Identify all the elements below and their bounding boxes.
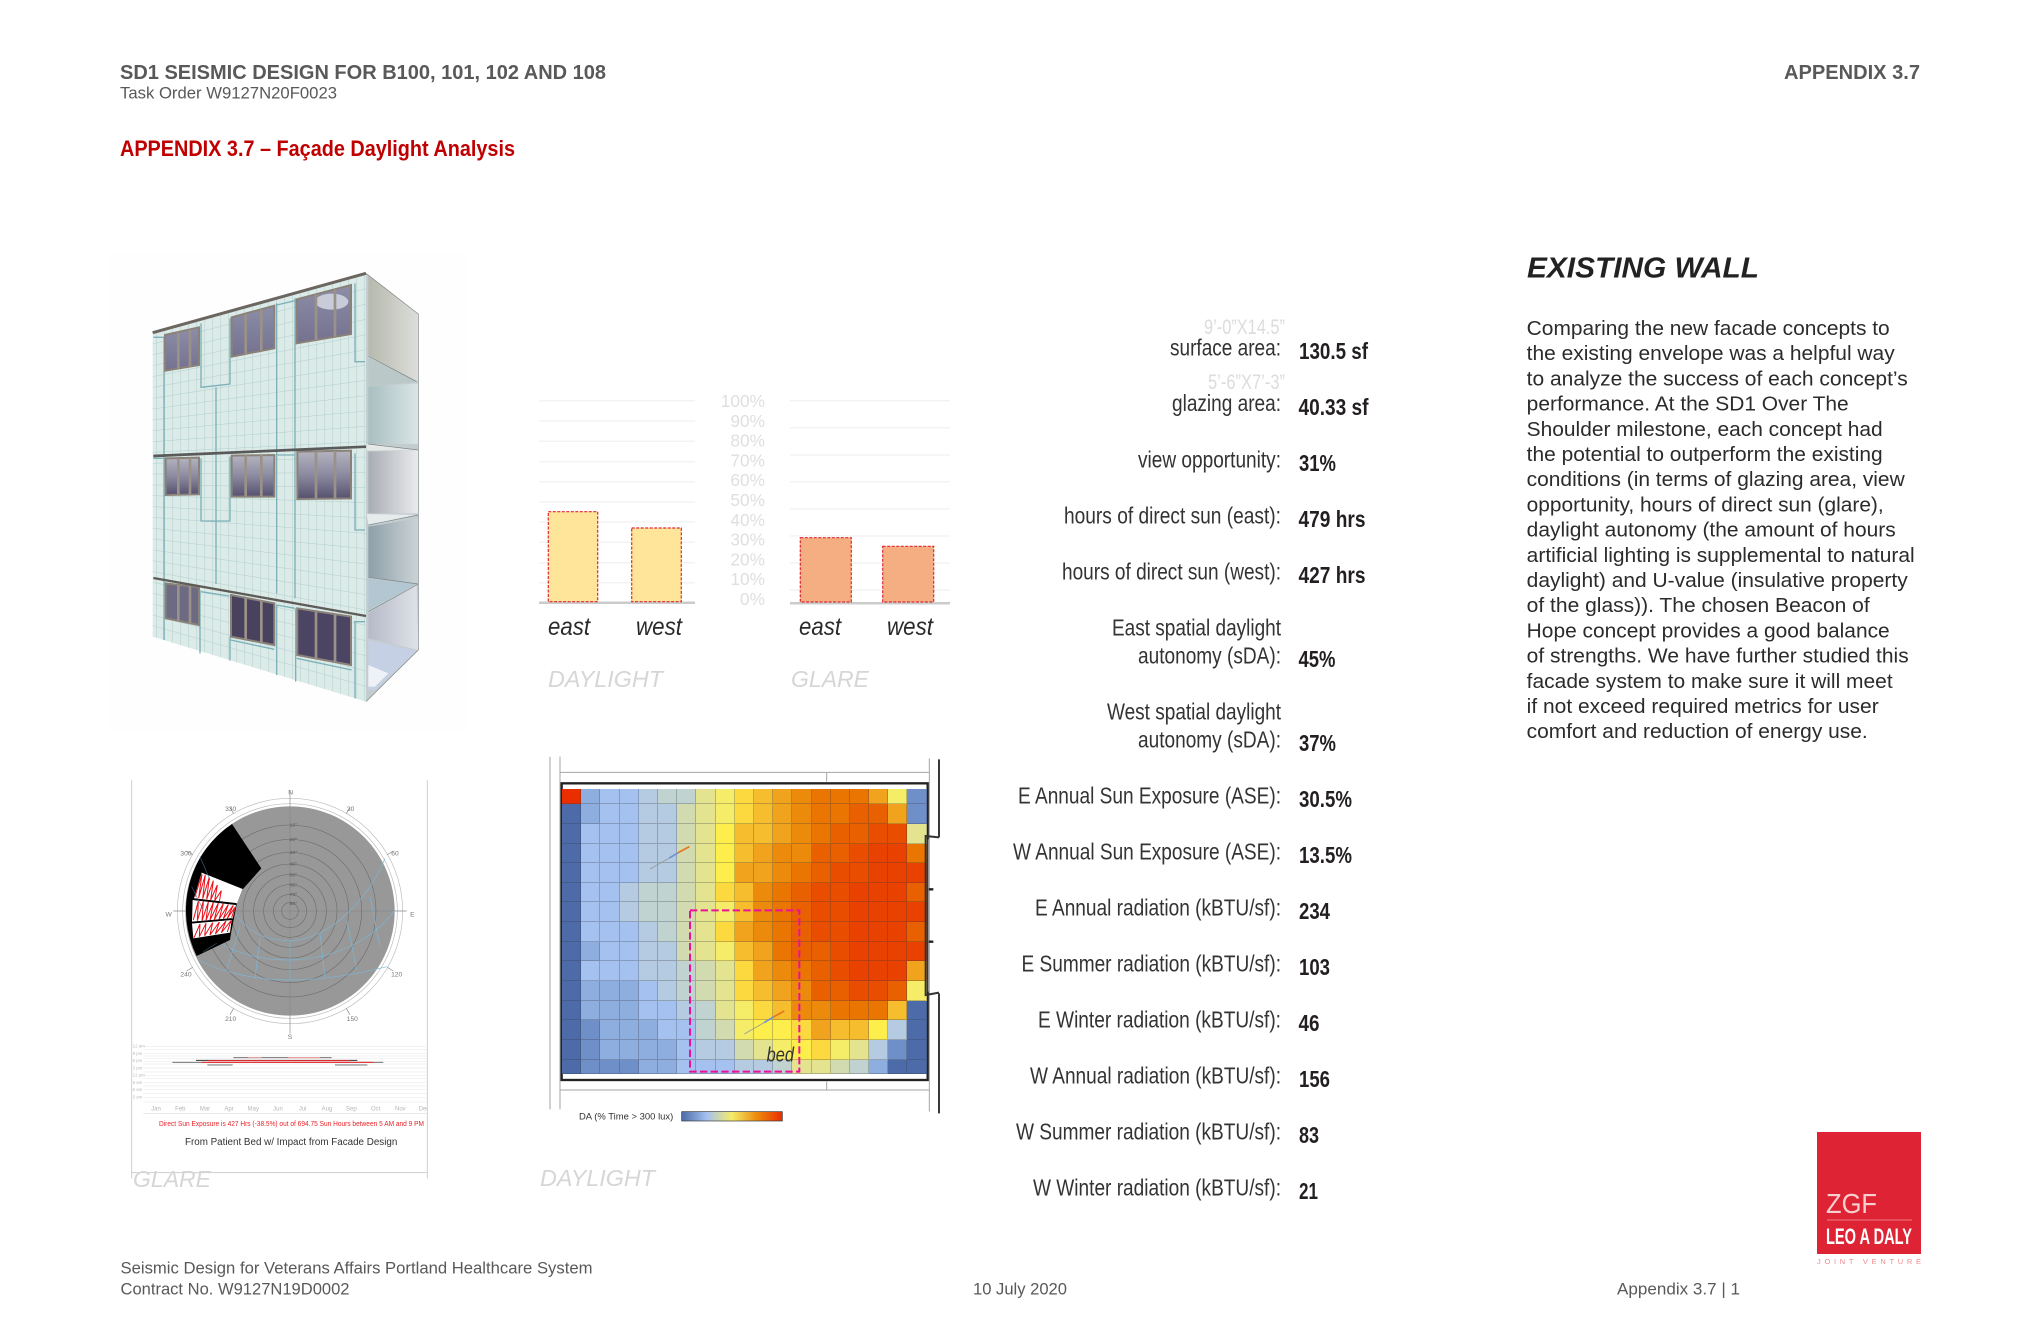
heatmap legend: [579, 1112, 782, 1122]
existing wall paragraph: facade system to make sure it will meet: [1527, 670, 1893, 693]
compass labels: 150: [347, 1016, 358, 1023]
metrics: surface area: 130.5 sf: [1299, 338, 1368, 364]
metrics: direct sun east: hours of direct sun (east):: [1064, 502, 1281, 528]
sun hours chart: 9 am: [133, 1080, 143, 1085]
compass labels: 60: [391, 850, 399, 857]
compass labels: [166, 789, 415, 1041]
metrics: W annual radiation: 156: [1299, 1066, 1330, 1092]
metrics: east sDA: autonomy (sDA):: [1138, 642, 1281, 668]
footer date: 10 July 2020: [973, 1280, 1067, 1298]
existing wall paragraph: Shoulder milestone, each concept had: [1527, 418, 1883, 441]
sun hours chart: Sep: [346, 1106, 357, 1112]
sun hours chart: Jan: [151, 1106, 161, 1112]
metrics: W winter radiation: W Winter radiation (kBTU/sf):: [1033, 1174, 1281, 1200]
compass labels: S: [288, 1034, 293, 1041]
ZGF Leo A Daly logo: LEO A DALY: [1826, 1224, 1912, 1249]
glare bar chart: [790, 401, 950, 692]
compass labels: 210: [225, 1016, 237, 1023]
compass labels: 10°: [290, 823, 297, 829]
percent axis labels: 70%: [730, 450, 765, 470]
glare chart caption: GLARE: [791, 666, 870, 692]
existing wall paragraph: conditions (in terms of glazing area, view: [1527, 468, 1905, 491]
existing wall heading: EXISTING WALL: [1527, 252, 1759, 284]
metrics: glazing area: 40.33 sf: [1298, 394, 1369, 420]
existing wall paragraph: if not exceed required metrics for user: [1527, 695, 1879, 718]
windows: [165, 285, 351, 665]
sun hours chart: May: [248, 1106, 259, 1112]
ZGF Leo A Daly logo: ZGF: [1826, 1188, 1877, 1219]
appendix tag top right: APPENDIX 3.7: [1784, 61, 1920, 84]
metrics: glazing area: 5’-6”X7’-3”: [1208, 371, 1285, 394]
percent axis labels: 50%: [730, 490, 765, 510]
metrics: E ASE: 30.5%: [1299, 786, 1352, 812]
compass labels: 50°: [290, 872, 297, 878]
compass labels: N: [288, 789, 293, 796]
daylight east label: east: [548, 613, 591, 641]
percent axis labels: 100%: [721, 391, 765, 411]
daylight panel caption: DAYLIGHT: [540, 1165, 657, 1191]
glare west bar: [883, 546, 934, 602]
sun hours chart: Oct: [371, 1106, 381, 1112]
metrics: E annual radiation: 234: [1299, 898, 1330, 924]
percent axis labels: 90%: [730, 411, 765, 431]
existing wall paragraph: to analyze the success of each concept’s: [1527, 367, 1908, 390]
floor bands: [153, 273, 366, 616]
metrics: W winter radiation: 21: [1299, 1178, 1318, 1204]
metrics: E winter radiation: 46: [1298, 1010, 1320, 1036]
metrics: east sDA: East spatial daylight: [1112, 614, 1281, 640]
direct sun caption: Direct Sun Exposure is 427 Hrs (-38.5%) out of 694.75 Sun Hours between 5 AM and 9 PM: [159, 1121, 424, 1128]
shaded obstruction: [186, 824, 261, 956]
sun hours chart: Aug: [322, 1106, 332, 1112]
compass labels: 20°: [290, 837, 297, 843]
sun hours chart: 9 pm: [133, 1051, 143, 1056]
metrics: E annual radiation: E Annual radiation (kBTU/sf):: [1035, 894, 1281, 920]
compass labels: 70°: [290, 892, 297, 898]
sun hours chart: Jun: [273, 1106, 283, 1112]
metrics: west sDA: [1107, 698, 1336, 756]
compass labels: 30: [347, 806, 355, 813]
percent axis labels: 0%: [740, 589, 765, 609]
footer page number: Appendix 3.7 | 1: [1617, 1280, 1740, 1298]
sun hours chart: 12 pm: [133, 1073, 145, 1078]
sun hours chart: 6 pm: [133, 1058, 143, 1063]
sun hours chart: 6 am: [133, 1087, 143, 1092]
existing wall paragraph: the potential to outperform the existing: [1527, 443, 1883, 466]
percent axis labels: 20%: [730, 549, 765, 569]
daylight west label: west: [636, 613, 683, 641]
compass labels: 30°: [290, 850, 297, 856]
percent axis labels: 10%: [730, 569, 765, 589]
window bump in east wall: [926, 836, 939, 995]
sun hours chart: Dec: [419, 1106, 429, 1112]
compass labels: 300: [180, 850, 192, 857]
compass labels: W: [166, 912, 173, 919]
sun hours chart: 3 am: [133, 1094, 143, 1099]
sun hours chart: Nov: [395, 1106, 406, 1112]
daylight west bar: [632, 528, 681, 602]
metrics: glazing area: [1172, 371, 1369, 420]
heatmap legend: DA (% Time > 300 lux): [579, 1112, 673, 1122]
existing wall paragraph: opportunity, hours of direct sun (glare),: [1527, 493, 1884, 516]
metrics: E ASE: E Annual Sun Exposure (ASE):: [1018, 782, 1281, 808]
existing wall paragraph: of the glass)). The chosen Beacon of: [1527, 594, 1870, 617]
existing wall paragraph: the existing envelope was a helpful way: [1527, 342, 1895, 365]
compass labels: 240: [180, 972, 192, 979]
existing wall paragraph: [1527, 317, 1915, 743]
metrics: direct sun west: hours of direct sun (west):: [1062, 558, 1281, 584]
metrics: W annual radiation: W Annual radiation (kBTU/sf):: [1030, 1062, 1281, 1088]
heatmap grid: [562, 789, 927, 1074]
existing wall paragraph: performance. At the SD1 Over The: [1527, 393, 1849, 416]
task order line: Task Order W9127N20F0023: [120, 84, 337, 102]
existing wall paragraph: daylight) and U-value (insulative property: [1527, 569, 1908, 592]
existing wall paragraph: of strengths. We have further studied this: [1527, 645, 1909, 668]
percent axis labels: 60%: [730, 470, 765, 490]
metrics: W ASE: 13.5%: [1299, 842, 1352, 868]
sun hours chart: Feb: [175, 1106, 186, 1112]
header title: SD1 SEISMIC DESIGN FOR B100, 101, 102 AND 108: [120, 61, 606, 84]
metrics: E winter radiation: E Winter radiation (kBTU/sf):: [1038, 1006, 1281, 1032]
sun hours chart: Jul: [299, 1106, 306, 1112]
compass labels: 330: [225, 806, 237, 813]
facade surface and panel grid: [153, 273, 366, 707]
sun hours chart: Apr: [224, 1106, 234, 1112]
compass labels: E: [410, 912, 415, 919]
footer project line: Seismic Design for Veterans Affairs Portland Healthcare System: [120, 1260, 592, 1278]
percent axis labels: [721, 391, 765, 609]
metrics: west sDA: West spatial daylight: [1107, 698, 1282, 724]
sun path glare panel: [132, 780, 429, 1178]
sun hours chart: [133, 1043, 429, 1113]
panel frame: [132, 780, 427, 1178]
metrics: view opportunity: view opportunity:: [1138, 446, 1281, 472]
sun hours chart: Mar: [200, 1106, 210, 1112]
percent axis labels: 40%: [730, 510, 765, 530]
building side section: [366, 273, 418, 702]
metrics: surface area: surface area:: [1170, 334, 1281, 360]
daylight heatmap panel: [550, 756, 940, 1122]
glare east bar: [800, 538, 851, 602]
sensor needle upper: [650, 847, 689, 869]
daylight chart caption: DAYLIGHT: [548, 666, 665, 692]
glare east label: east: [799, 613, 842, 641]
percent axis labels: 30%: [730, 530, 765, 550]
ZGF Leo A Daly logo: [1817, 1132, 1921, 1266]
metrics: direct sun west: 427 hrs: [1298, 562, 1366, 588]
page heading: APPENDIX 3.7 – Façade Daylight Analysis: [120, 136, 515, 161]
compass labels: 80°: [290, 901, 297, 907]
bed outline: [690, 910, 799, 1072]
bed label: bed: [767, 1044, 795, 1067]
glare panel caption: GLARE: [133, 1166, 212, 1192]
sun hours chart: 12 am: [133, 1043, 145, 1048]
existing wall paragraph: Hope concept provides a good balance: [1527, 619, 1890, 642]
metrics: surface area: 9’-0”X14.5”: [1204, 316, 1285, 339]
window openings with direct sun hatch: [192, 857, 243, 952]
building facade rendering: [152, 272, 419, 702]
metrics: view opportunity: 31%: [1299, 450, 1336, 476]
metrics: direct sun east: 479 hrs: [1298, 506, 1366, 532]
existing wall paragraph: Comparing the new facade concepts to: [1527, 317, 1890, 340]
metrics: west sDA: autonomy (sDA):: [1138, 726, 1281, 752]
metrics: east sDA: 45%: [1298, 646, 1336, 672]
daylight east bar: [548, 512, 598, 602]
percent axis labels: 80%: [730, 431, 765, 451]
polar sun diagram: [166, 789, 415, 1041]
existing wall paragraph: comfort and reduction of energy use.: [1527, 720, 1868, 743]
glare west label: west: [887, 613, 934, 641]
metrics: glazing area: glazing area:: [1172, 390, 1281, 416]
metrics: surface area: [1170, 316, 1368, 364]
chart subtitle: From Patient Bed w/ Impact from Facade Design: [185, 1137, 397, 1148]
metrics: E summer radiation: 103: [1299, 954, 1330, 980]
metrics: east sDA: [1112, 614, 1336, 672]
metrics: W summer radiation: W Summer radiation (kBTU/sf):: [1016, 1118, 1281, 1144]
metrics: E summer radiation: E Summer radiation (kBTU/sf):: [1022, 950, 1281, 976]
ZGF Leo A Daly logo: JOINT VENTURE: [1817, 1257, 1921, 1266]
metrics: W summer radiation: 83: [1299, 1122, 1319, 1148]
existing wall paragraph: artificial lighting is supplemental to natural: [1527, 544, 1915, 567]
metrics: west sDA: 37%: [1299, 730, 1336, 756]
compass labels: 60°: [290, 882, 297, 888]
footer contract line: Contract No. W9127N19D0002: [120, 1280, 350, 1298]
sensor needle lower: [744, 1011, 784, 1034]
compass labels: 40°: [290, 862, 297, 868]
existing wall paragraph: daylight autonomy (the amount of hours: [1527, 519, 1896, 542]
sun hours chart: 3 pm: [133, 1065, 143, 1070]
daylight bar chart: [539, 401, 695, 692]
compass labels: 120: [391, 972, 403, 979]
metrics: W ASE: W Annual Sun Exposure (ASE):: [1013, 838, 1281, 864]
